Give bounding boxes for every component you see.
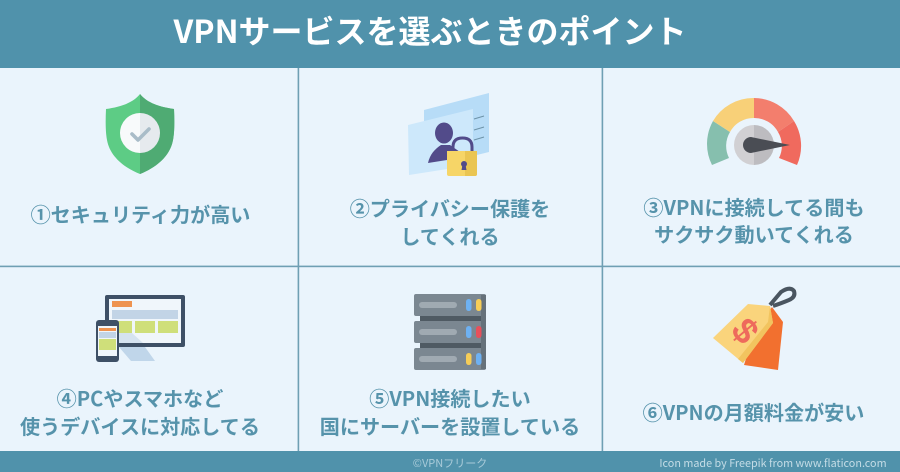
label 3: ③VPNに接続してる間も (643, 192, 865, 221)
icon: price tags (713, 289, 794, 370)
label 5: 国にサーバーを設置している (320, 411, 580, 440)
icon: server rack (414, 294, 486, 370)
header band (0, 0, 900, 68)
title: VPNサービスを選ぶときのポイント (172, 7, 687, 53)
footer credit: icon attribution: Icon made by Freepik from www.flaticon.com (659, 455, 887, 471)
footer credit: VPN Freak: ©VPNフリーク (413, 455, 487, 471)
label 2 (350, 193, 550, 250)
icon: security shield (106, 94, 174, 174)
label 4 (20, 383, 260, 440)
label 5: ⑤VPN接続したい (369, 383, 531, 412)
icon: speedometer gauge (707, 98, 801, 165)
icon: price tags: $ (723, 310, 768, 352)
label 6: ⑥VPNの月額料金が安い (643, 397, 864, 426)
icon: desktop monitor and smartphone (96, 295, 185, 362)
label 3: サクサク動いてくれる (654, 219, 854, 248)
label 5 (320, 383, 580, 440)
label 2: ②プライバシー保護を (350, 193, 550, 222)
label 4: 使うデバイスに対応してる (20, 411, 260, 440)
label 2: してくれる (400, 221, 500, 250)
label 4: ④PCやスマホなど (57, 383, 223, 412)
icon: privacy ID cards with padlock (408, 93, 489, 176)
label 1: ①セキュリティ力が高い (31, 199, 250, 228)
label 3 (643, 192, 865, 248)
footer band (0, 451, 900, 472)
